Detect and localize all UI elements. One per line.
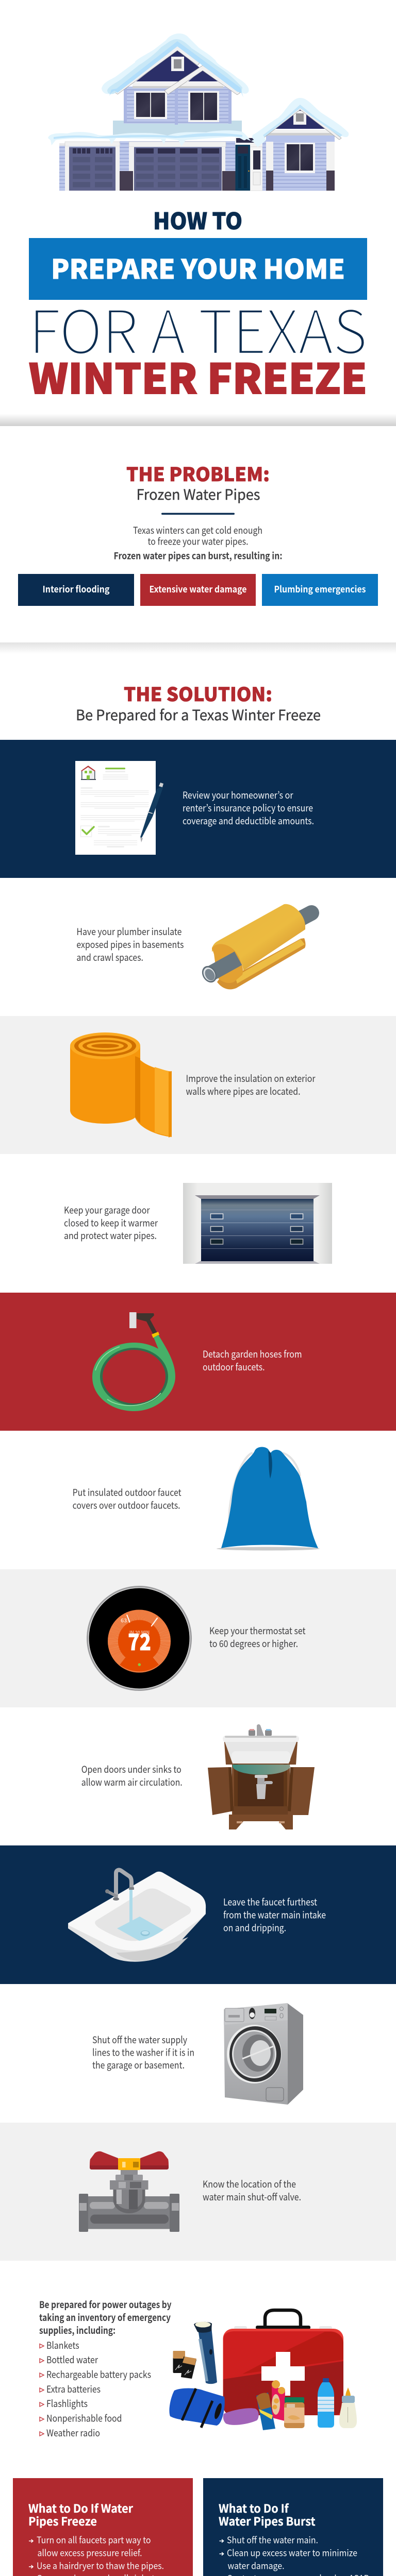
text: know shut-off valve: Know the location of the bbox=[203, 2177, 296, 2191]
text: faucet covers: Put insulated outdoor faucet bbox=[73, 1486, 182, 1499]
title banner bbox=[29, 238, 367, 300]
card list: allow excess pressure relief. bbox=[37, 2546, 142, 2560]
lower walls bbox=[59, 144, 120, 191]
title line: winter freeze: WINTER FREEZE bbox=[29, 346, 367, 406]
text: emergency supplies intro: supplies, including: bbox=[39, 2324, 116, 2337]
text: improve insulation: Improve the insulation on exterior bbox=[186, 1072, 316, 1085]
text: leave faucet dripping: from the water main intake bbox=[223, 1908, 326, 1922]
icon: insulated pipe bbox=[199, 904, 311, 989]
card heading bbox=[28, 2500, 133, 2529]
text: detach hoses: outdoor faucets. bbox=[203, 1360, 265, 1374]
row 11: main shut-off valve bbox=[0, 2123, 396, 2261]
problem description: to freeze your water pipes. bbox=[147, 535, 249, 548]
icon: insulation roll bbox=[70, 1032, 172, 1138]
card heading: Pipes Freeze bbox=[28, 2513, 97, 2529]
row 1: insurance policy bbox=[0, 740, 396, 878]
upper windows bbox=[134, 91, 167, 119]
text: review insurance: renter’s insurance policy to ensure bbox=[183, 801, 313, 815]
text: thermostat: to 60 degrees or higher. bbox=[209, 1637, 298, 1650]
title line: how to: HOW TO bbox=[153, 203, 242, 236]
title line: for a texas: FOR A TEXAS bbox=[29, 284, 367, 371]
heading: the solution: THE SOLUTION: bbox=[124, 679, 272, 707]
text: review insurance: Review your homeowner’s or bbox=[183, 788, 293, 802]
text: emergency supplies intro: Be prepared for power outages by bbox=[39, 2298, 172, 2311]
text: garage door: Keep your garage door bbox=[64, 1204, 150, 1217]
text: insulate pipes bbox=[76, 925, 184, 964]
text: improve insulation bbox=[186, 1072, 316, 1098]
snow: right roof bbox=[252, 98, 349, 140]
subheading: frozen water pipes: Frozen Water Pipes bbox=[136, 484, 260, 504]
row 5: garden hose bbox=[0, 1293, 396, 1431]
list: emergency supplies: Extra batteries bbox=[46, 2382, 101, 2396]
text: insulate pipes: and crawl spaces. bbox=[76, 951, 143, 964]
text: leave faucet dripping bbox=[223, 1895, 326, 1934]
list: emergency supplies: Blankets bbox=[46, 2338, 79, 2352]
flashlight bbox=[194, 2321, 217, 2384]
batteries bbox=[173, 2351, 196, 2379]
text: review insurance: coverage and deductible amounts. bbox=[183, 814, 314, 827]
upper storey bbox=[124, 87, 231, 124]
list: emergency supplies: Nonperishable food bbox=[46, 2411, 122, 2425]
row 9: dripping faucet bbox=[0, 1845, 396, 1984]
heading: the solution bbox=[76, 679, 321, 725]
list: emergency supplies bbox=[40, 2338, 151, 2439]
blanket bbox=[169, 2388, 225, 2428]
text: know shut-off valve bbox=[203, 2177, 301, 2204]
text: garage door: and protect water pipes. bbox=[64, 1229, 157, 1242]
card list: Use a hairdryer to thaw the pipes. bbox=[37, 2560, 164, 2572]
box: extensive water damage: Extensive water damage bbox=[150, 583, 246, 596]
text: improve insulation: walls where pipes are located. bbox=[186, 1084, 300, 1098]
row 2: pipe insulation bbox=[76, 904, 311, 989]
box: plumbing emergencies bbox=[262, 574, 378, 606]
card list: Shut off the water main. bbox=[227, 2534, 318, 2546]
text: thermostat: Keep your thermostat set bbox=[209, 1624, 306, 1637]
icon: vanity cabinet with open doors bbox=[208, 1724, 315, 1829]
box: extensive water damage bbox=[140, 574, 256, 606]
first aid case bbox=[223, 2310, 343, 2415]
heading: the solution: Be Prepared for a Texas Winter Freeze bbox=[76, 704, 321, 725]
text: emergency supplies intro: taking an inventory of emergency bbox=[39, 2311, 171, 2324]
row 4: garage door bbox=[64, 1183, 332, 1264]
water bottle bbox=[318, 2378, 334, 2428]
box: plumbing emergencies: Plumbing emergencies bbox=[274, 583, 366, 596]
icon: thermostat: IN 20 MIN bbox=[129, 1629, 150, 1637]
text: garage door bbox=[64, 1204, 158, 1242]
box: interior flooding: Interior flooding bbox=[42, 583, 110, 596]
text: shut off washer supply: lines to the washer if it is in bbox=[92, 2045, 194, 2059]
card list: Clean up excess water to minimize bbox=[227, 2546, 357, 2560]
icon: first aid kit and supplies bbox=[169, 2310, 357, 2430]
snow: main roof bbox=[102, 33, 249, 94]
icon: shut-off valve bbox=[79, 2151, 179, 2232]
card list bbox=[220, 2534, 370, 2576]
card heading: What to Do If bbox=[219, 2500, 289, 2516]
text: detach hoses bbox=[203, 1347, 302, 1374]
stone bases bbox=[120, 171, 133, 191]
gable trims bbox=[114, 45, 200, 94]
text: shut off washer supply: the garage or basement. bbox=[92, 2058, 185, 2072]
text: open doors: allow warm air circulation. bbox=[81, 1775, 183, 1789]
text: shut off washer supply: Shut off the water supply bbox=[92, 2033, 187, 2046]
text: faucet covers bbox=[73, 1486, 182, 1512]
text: garage door: closed to keep it warmer bbox=[64, 1216, 158, 1229]
panel: the problem bbox=[0, 414, 396, 654]
illustration: snow-covered house bbox=[48, 33, 349, 191]
garage doors bbox=[69, 147, 116, 191]
problem description: Texas winters can get cold enough bbox=[133, 523, 262, 537]
text: emergency supplies intro bbox=[39, 2298, 172, 2337]
snow: garage roofline bbox=[48, 130, 266, 147]
icon: thermostat bbox=[87, 1586, 192, 1691]
text: thermostat bbox=[209, 1624, 306, 1650]
text: leave faucet dripping: on and dripping. bbox=[223, 1921, 286, 1934]
row 8: open sink doors bbox=[81, 1724, 315, 1829]
text: open doors bbox=[81, 1762, 183, 1789]
card: what to do if water pipes freeze bbox=[13, 2478, 193, 2576]
title bbox=[29, 203, 367, 406]
list: emergency supplies: Weather radio bbox=[46, 2426, 100, 2439]
icon: garage door bbox=[183, 1183, 332, 1264]
card heading: Water Pipes Burst bbox=[219, 2513, 316, 2529]
card heading bbox=[219, 2500, 316, 2529]
text: insulate pipes: Have your plumber insulate bbox=[76, 925, 182, 938]
icon: garden hose bbox=[92, 1312, 175, 1411]
row 7: thermostat bbox=[0, 1569, 396, 1707]
text: review insurance bbox=[183, 788, 314, 827]
blue band behind roof bbox=[113, 121, 242, 136]
card: what to do if water pipes burst bbox=[203, 2478, 383, 2576]
list: emergency supplies: Rechargeable battery packs bbox=[46, 2368, 151, 2381]
text: open doors: Open doors under sinks to bbox=[81, 1762, 182, 1776]
row 10: washing machine bbox=[92, 2003, 303, 2105]
icon: thermostat: 72 bbox=[128, 1624, 151, 1657]
card list: Turn on all faucets part way to bbox=[37, 2534, 151, 2546]
list: emergency supplies: Bottled water bbox=[46, 2353, 98, 2366]
problem description: Frozen water pipes can burst, resulting in: bbox=[113, 549, 283, 563]
text: faucet covers: covers over outdoor faucets. bbox=[73, 1498, 180, 1512]
row 12: emergency supplies bbox=[39, 2298, 357, 2439]
icon: faucet cover bag bbox=[217, 1447, 320, 1551]
baby bottle bbox=[339, 2387, 357, 2428]
entry door bbox=[235, 138, 262, 148]
icon: insurance document and pen bbox=[75, 761, 163, 855]
card list: water damage. bbox=[228, 2560, 285, 2572]
title line: prepare your home: PREPARE YOUR HOME bbox=[51, 248, 345, 286]
text: detach hoses: Detach garden hoses from bbox=[203, 1347, 302, 1361]
problem description bbox=[113, 523, 283, 563]
text: know shut-off valve: water main shut-off valve. bbox=[203, 2190, 301, 2204]
heading: the problem: THE PROBLEM: bbox=[126, 459, 270, 487]
icon: dripping sink bbox=[68, 1870, 206, 1962]
right wing bbox=[262, 140, 267, 191]
row 3: wall insulation bbox=[0, 1016, 396, 1154]
text: leave faucet dripping: Leave the faucet furthest bbox=[223, 1895, 317, 1908]
list: emergency supplies: Flashlights bbox=[46, 2397, 88, 2410]
purple pouch bbox=[223, 2408, 259, 2425]
box: interior flooding bbox=[18, 574, 134, 606]
text: insulate pipes: exposed pipes in basements bbox=[76, 938, 184, 951]
text: shut off washer supply bbox=[92, 2033, 194, 2072]
row 6: faucet cover bbox=[73, 1447, 320, 1551]
food items bbox=[256, 2380, 304, 2430]
icon: thermostat: 63 bbox=[121, 1617, 127, 1624]
card heading: What to Do If Water bbox=[28, 2500, 133, 2516]
card list bbox=[29, 2534, 164, 2576]
icon: washing machine bbox=[224, 2003, 303, 2105]
